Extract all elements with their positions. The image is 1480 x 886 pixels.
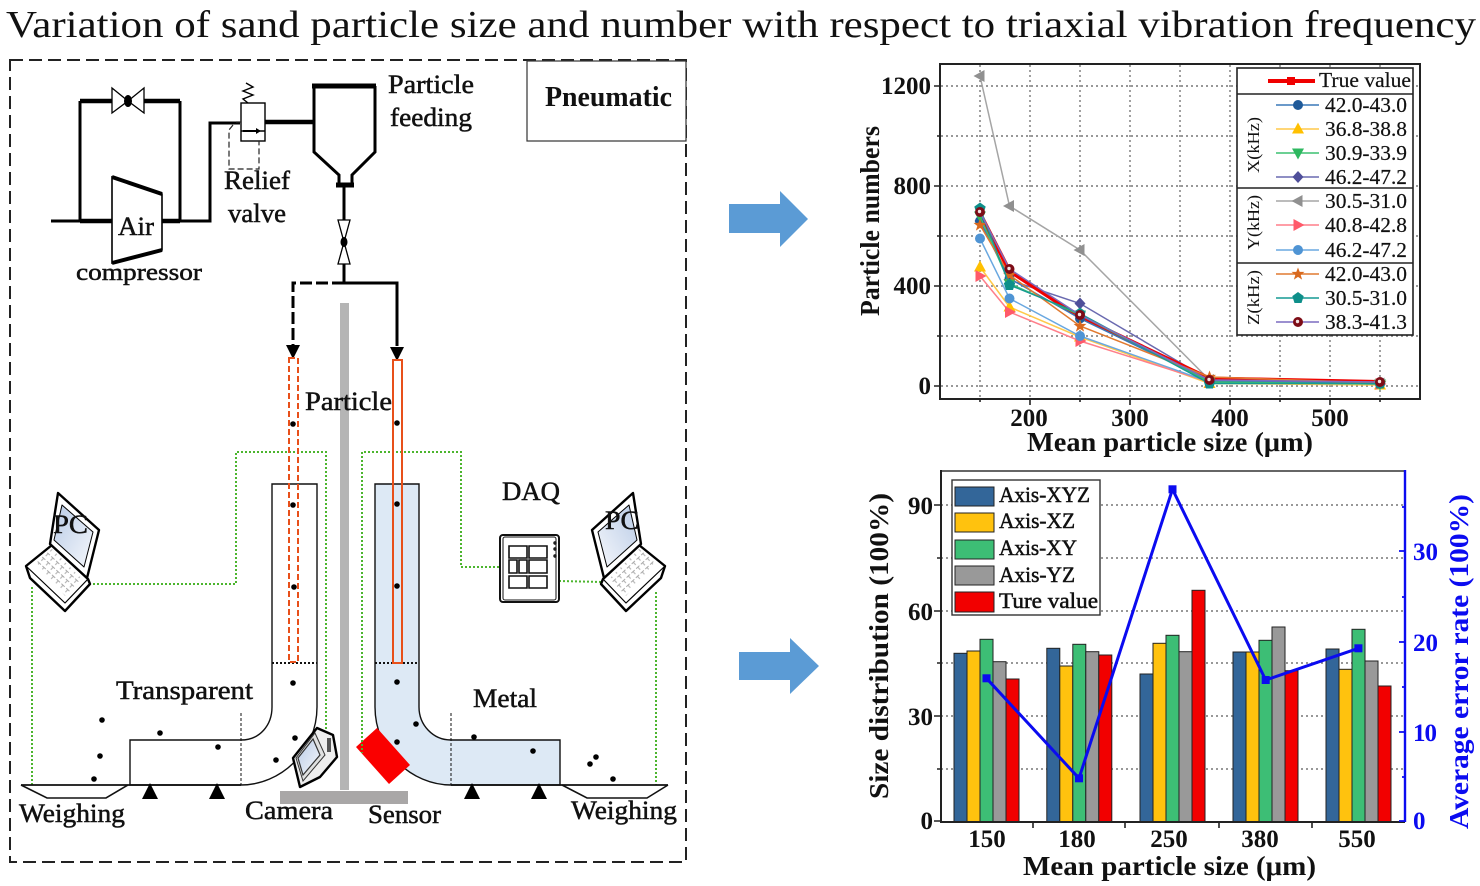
sand particles bbox=[91, 420, 616, 782]
labels: pipes, DAQ and devices bbox=[19, 477, 677, 829]
bars: 250 bbox=[1140, 590, 1205, 822]
legend: X group bbox=[1244, 93, 1407, 189]
legend: Axis-XZ bbox=[999, 508, 1075, 533]
icon: sensor bbox=[356, 728, 410, 784]
legend: Y group: Y(kHz) bbox=[1244, 195, 1263, 250]
legend: X group: X(kHz) bbox=[1244, 117, 1263, 173]
support column bbox=[280, 303, 408, 804]
axes bbox=[934, 470, 1405, 828]
label: air compressor: Air bbox=[118, 212, 154, 241]
label: air compressor bbox=[76, 212, 202, 286]
sensor wire overlay bbox=[361, 728, 363, 753]
legend: true value bbox=[1268, 68, 1411, 92]
legend: Axis-XY bbox=[999, 535, 1077, 560]
labels: pipes, DAQ and devices: Transparent bbox=[116, 676, 254, 705]
icon: relief valve bbox=[229, 83, 265, 169]
legend bbox=[952, 480, 1100, 615]
series: true value bbox=[977, 210, 1383, 385]
right axis tick labels: 30 bbox=[1413, 539, 1438, 566]
labels: pipes, DAQ and devices: Camera bbox=[245, 796, 334, 825]
left axis title: Size distribution (100%) bbox=[864, 493, 894, 799]
bars: 380 bbox=[1233, 627, 1298, 822]
labels: pipes, DAQ and devices: Sensor bbox=[368, 800, 441, 829]
label: particle feeding: Particle bbox=[388, 70, 474, 99]
label: air compressor: compressor bbox=[76, 260, 202, 286]
series: 46.2-47.2 X bbox=[974, 215, 1386, 390]
x axis tick labels bbox=[1010, 405, 1349, 432]
legend: X group: 42.0-43.0 bbox=[1325, 93, 1407, 117]
right axis tick labels bbox=[1413, 539, 1438, 835]
x axis tick labels: 250 bbox=[1150, 826, 1188, 853]
legend: X group: 30.9-33.9 bbox=[1325, 141, 1407, 165]
label: Pneumatic box: Pneumatic bbox=[545, 82, 672, 113]
legend: Z group: 30.5-31.0 bbox=[1325, 286, 1407, 310]
icon: DAQ unit bbox=[500, 535, 559, 602]
series: 30.5-31.0 Z bbox=[974, 202, 1386, 388]
arrow: feed to metal pipe bbox=[344, 283, 404, 361]
label: Pneumatic box bbox=[527, 61, 686, 141]
series: 42.0-43.0 X bbox=[975, 216, 1385, 388]
legend: X group: 46.2-47.2 bbox=[1325, 165, 1407, 189]
x axis tick labels: 180 bbox=[1058, 826, 1096, 853]
legend: Y group: 46.2-47.2 bbox=[1325, 238, 1407, 262]
legend: Axis-XYZ bbox=[999, 482, 1090, 507]
legend: Z group: 42.0-43.0 bbox=[1325, 262, 1407, 286]
icon: bypass valve bbox=[112, 88, 144, 113]
left axis tick labels: 90 bbox=[908, 493, 933, 520]
series: 46.2-47.2 Y bbox=[975, 234, 1385, 389]
icon: left laptop bbox=[26, 493, 99, 611]
label: particle feeding: feeding bbox=[390, 103, 472, 132]
data wiring bbox=[32, 452, 656, 785]
bars: 180 bbox=[1047, 644, 1112, 822]
label: relief valve: Relief bbox=[224, 166, 290, 195]
labels: pipes, DAQ and devices: Metal bbox=[473, 684, 537, 713]
feed line and valve bbox=[338, 185, 350, 283]
panel: pneumatic test rig schematic bbox=[10, 60, 686, 862]
legend: Y group: 30.5-31.0 bbox=[1325, 189, 1407, 213]
air supply pipework bbox=[51, 101, 313, 221]
legend: Z group: Z(kHz) bbox=[1244, 270, 1263, 325]
series: 40.8-42.8 Y bbox=[976, 270, 1386, 390]
legend: Y group bbox=[1244, 189, 1407, 262]
legend: Z group: 38.3-41.3 bbox=[1325, 310, 1407, 334]
line chart: particle numbers vs mean particle size bbox=[855, 64, 1420, 457]
left axis tick labels bbox=[908, 493, 933, 835]
series: 36.8-38.8 X bbox=[974, 260, 1386, 390]
x axis title: Mean particle size (μm) bbox=[1027, 427, 1313, 457]
x axis title: Mean particle size (μm) bbox=[1023, 851, 1316, 881]
x axis tick labels bbox=[968, 826, 1376, 853]
y axis title: Particle numbers bbox=[855, 126, 885, 316]
y axis tick labels: 400 bbox=[894, 273, 931, 300]
metal pipe bbox=[375, 484, 560, 785]
right axis tick labels: 10 bbox=[1413, 720, 1437, 747]
x axis tick labels: 200 bbox=[1010, 405, 1048, 432]
orange inner tube: transparent side bbox=[289, 358, 298, 662]
x axis tick labels: 300 bbox=[1111, 405, 1149, 432]
weighing scales and supports bbox=[21, 783, 668, 799]
legend: true value: True value bbox=[1319, 68, 1411, 92]
series: 38.3-41.3 Z bbox=[975, 207, 1385, 387]
legend: X group: 36.8-38.8 bbox=[1325, 117, 1407, 141]
bars: 550 bbox=[1326, 629, 1391, 822]
x axis tick labels: 500 bbox=[1311, 405, 1349, 432]
axes frame and ticks bbox=[934, 64, 1420, 405]
legend: Ture value bbox=[999, 588, 1098, 613]
legend: Axis-YZ bbox=[999, 562, 1075, 587]
grid bbox=[941, 65, 1420, 399]
label: relief valve: valve bbox=[228, 199, 286, 228]
left axis tick labels: 60 bbox=[908, 599, 933, 626]
right axis title: Average error rate (100%) bbox=[1444, 494, 1474, 829]
arrow: feed to transparent pipe (dashed) bbox=[286, 283, 344, 359]
title: Variation of sand particle size and number with respect to triaxial vibration frequency bbox=[6, 4, 1476, 46]
series: 30.5-31.0 Y bbox=[974, 70, 1384, 390]
bar and line chart: size distribution and average error rate bbox=[864, 470, 1474, 881]
labels: pipes, DAQ and devices: DAQ bbox=[502, 477, 560, 506]
icon: air compressor bbox=[112, 177, 162, 263]
series: 42.0-43.0 Z bbox=[974, 218, 1386, 389]
label: PC right: PC bbox=[605, 506, 639, 535]
right axis tick labels: 0 bbox=[1413, 808, 1426, 835]
icon: particle feeding hopper bbox=[312, 86, 376, 185]
x axis tick labels: 400 bbox=[1211, 405, 1249, 432]
y axis tick labels: 800 bbox=[894, 173, 931, 200]
legend: Y group: 40.8-42.8 bbox=[1325, 213, 1407, 237]
label: particle: Particle bbox=[305, 387, 392, 416]
label: PC left: PC bbox=[53, 510, 88, 539]
right axis tick labels: 20 bbox=[1413, 630, 1438, 657]
left axis tick labels: 0 bbox=[920, 808, 933, 835]
grid bbox=[941, 505, 1405, 769]
label: particle feeding bbox=[388, 70, 474, 132]
legend: Z group bbox=[1244, 262, 1407, 334]
x axis tick labels: 380 bbox=[1241, 826, 1279, 853]
legend bbox=[1237, 68, 1413, 335]
error rate line bbox=[982, 485, 1362, 782]
x axis tick labels: 150 bbox=[968, 826, 1006, 853]
y axis tick labels: 0 bbox=[918, 373, 931, 400]
label: relief valve bbox=[224, 166, 290, 228]
series: 30.9-33.9 X bbox=[974, 212, 1386, 390]
orange inner tube: metal side bbox=[393, 360, 402, 663]
transparent pipe bbox=[130, 484, 317, 785]
y axis tick labels: 1200 bbox=[881, 73, 931, 100]
bars: 150 bbox=[954, 639, 1019, 822]
icon: camera bbox=[293, 728, 337, 787]
x axis tick labels: 550 bbox=[1338, 826, 1376, 853]
arrow: to bar chart bbox=[739, 638, 819, 694]
arrow: to line chart bbox=[729, 191, 808, 247]
icon: right laptop bbox=[592, 493, 665, 611]
labels: pipes, DAQ and devices: Weighing bbox=[19, 799, 125, 828]
y axis tick labels bbox=[881, 73, 931, 400]
labels: pipes, DAQ and devices: Weighing bbox=[571, 796, 677, 825]
left axis tick labels: 30 bbox=[908, 704, 933, 731]
